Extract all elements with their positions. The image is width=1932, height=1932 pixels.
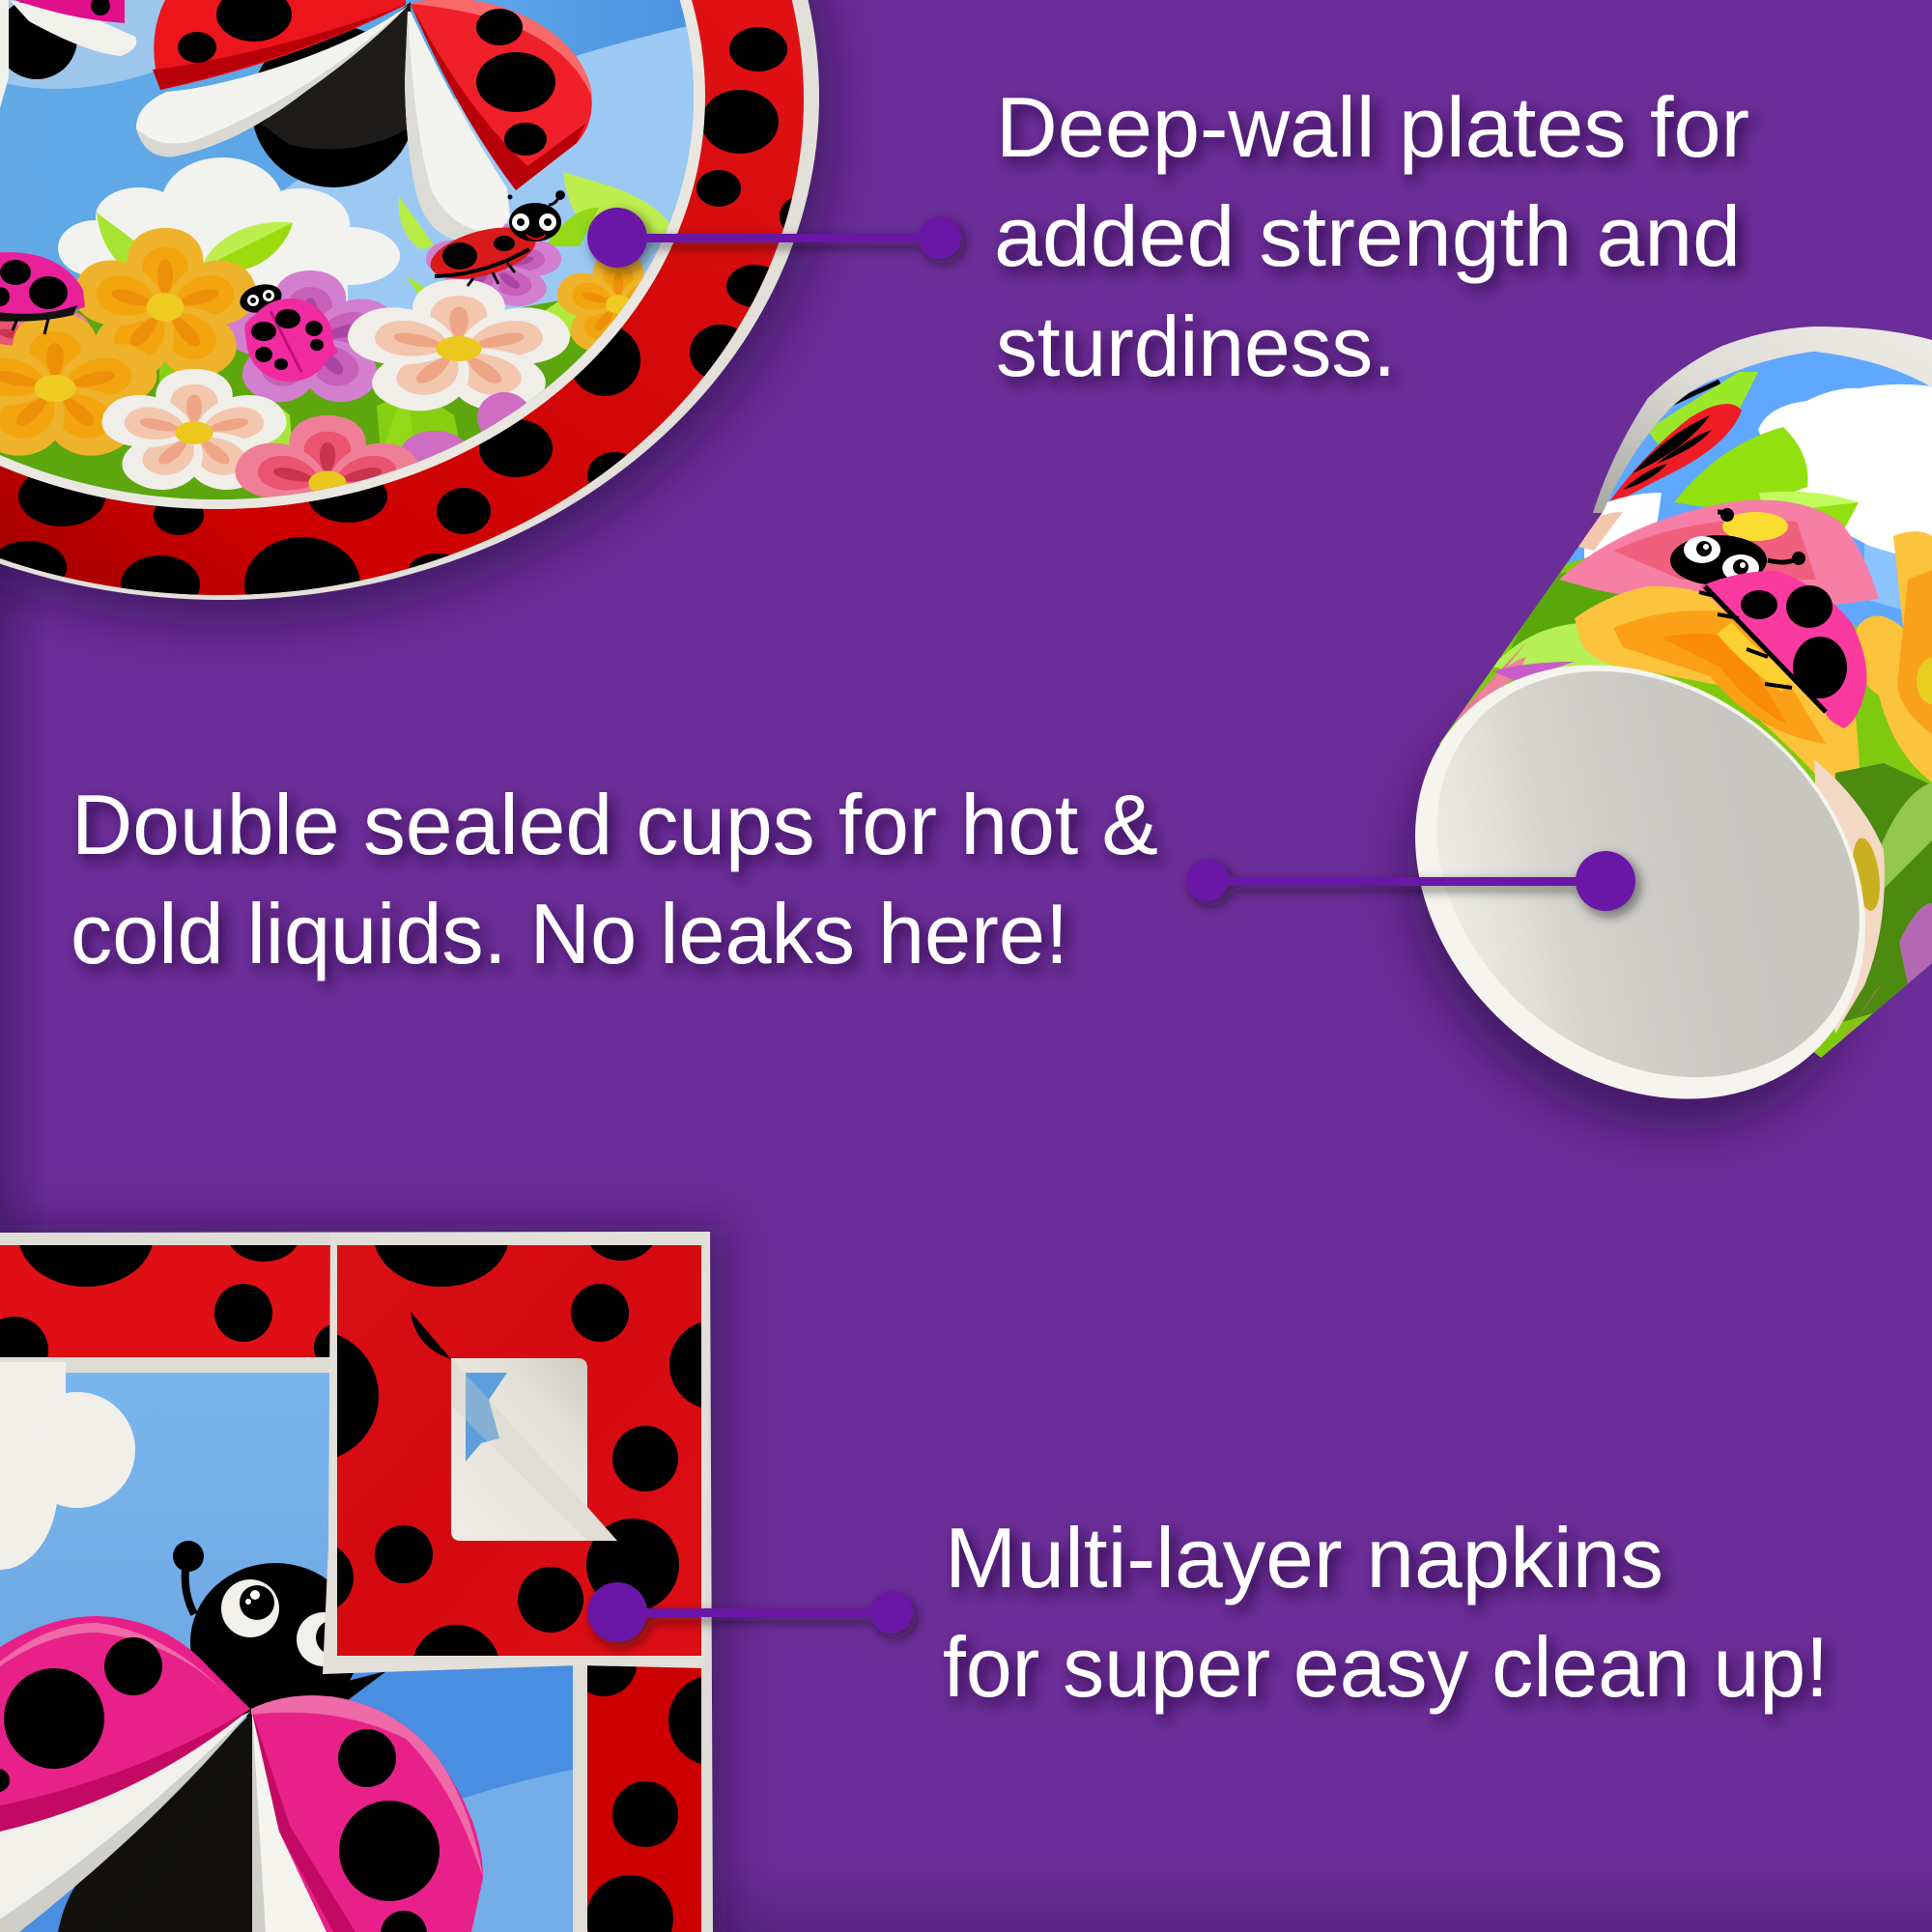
text block: napkin feature: Multi-layer napkins	[945, 1510, 1663, 1605]
napkin panel dots	[337, 1245, 701, 1656]
text block: cup feature: Double sealed cups for hot &	[71, 777, 1158, 872]
cup shadow	[1320, 607, 1932, 1219]
cup base	[1327, 576, 1932, 1188]
plate artwork	[0, 0, 694, 499]
panel: paper cup	[1186, 319, 1932, 1219]
text block: cup feature: cold liquids. No leaks here!	[71, 886, 1068, 981]
cup dark foliage	[1814, 759, 1932, 1048]
heading: plate feature text: Deep-wall plates for	[996, 79, 1749, 175]
napkin folded front panel	[323, 1232, 701, 1674]
large red ladybug	[136, 0, 592, 242]
napkin red right strip	[587, 1665, 701, 1932]
cup flower right	[1856, 531, 1932, 782]
panel: napkins	[0, 1184, 913, 1932]
cup pink ladybug	[1670, 508, 1866, 728]
text block: cup feature	[71, 777, 1158, 981]
upper-left pink ladybug fragment	[0, 0, 136, 108]
callout: napkin layers	[587, 1582, 913, 1642]
heading: plate feature text: sturdiness.	[996, 298, 1396, 394]
leaves	[97, 172, 676, 275]
callout: plate strength	[587, 208, 961, 268]
plate rim	[0, 0, 819, 632]
text block: napkin feature	[943, 1510, 1829, 1715]
cup flower pink	[1559, 500, 1879, 605]
plate inner well ring	[0, 0, 705, 509]
big pink ladybug	[0, 1541, 483, 1932]
small pink ladybug	[237, 280, 338, 382]
heading: plate feature text: added strength and	[994, 188, 1741, 284]
green foliage	[0, 296, 632, 499]
napkin paper base	[0, 1232, 713, 1932]
small red ladybug	[425, 190, 565, 289]
plate shadow	[0, 0, 836, 626]
napkin red top band	[0, 1245, 330, 1357]
flowers	[0, 222, 686, 554]
cup flower orange	[1575, 586, 1861, 792]
folded corner	[451, 1358, 617, 1541]
cup rim	[1593, 327, 1932, 513]
clouds	[58, 157, 400, 314]
text block: napkin feature: for super easy clean up!	[943, 1619, 1829, 1715]
napkin cloud	[0, 1362, 135, 1570]
napkin sky	[0, 1373, 573, 1932]
callout: cup leak seal	[1186, 851, 1635, 911]
cup body artwork	[1430, 319, 1932, 1072]
panel: paper plate	[0, 0, 961, 632]
napkin shadow	[0, 1225, 726, 1932]
heading: plate feature text	[994, 79, 1749, 394]
left pink ladybug	[0, 252, 85, 334]
